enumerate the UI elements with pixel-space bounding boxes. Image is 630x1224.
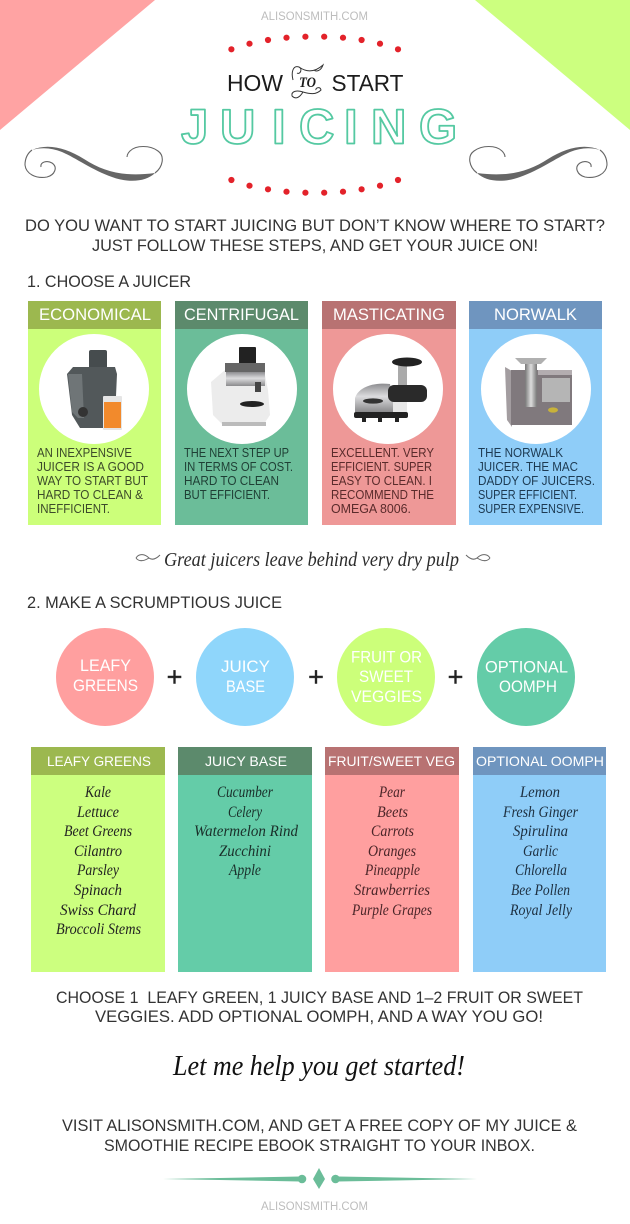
circle: fruit or sweet veggies — [337, 628, 435, 726]
intro text: DO YOU WANT TO START JUICING BUT DON’T KNOW WHERE TO START? — [25, 216, 605, 235]
plus sign: + — [308, 662, 324, 692]
title: HOW — [227, 70, 283, 96]
heading: step 1: 1. CHOOSE A JUICER — [27, 272, 191, 291]
divider ornament — [163, 1168, 477, 1189]
panel heading: CENTRIFUGAL — [184, 305, 299, 324]
panel text: AN INEXPENSIVE — [37, 446, 132, 460]
panel text: HARD TO CLEAN & — [37, 488, 144, 502]
list items: Carrots — [371, 823, 414, 840]
list items: Lemon — [519, 784, 560, 801]
list heading: OPTIONAL OOMPH — [476, 753, 604, 769]
list items — [194, 784, 299, 879]
list items: Oranges — [368, 843, 416, 860]
panel text: SUPER EXPENSIVE. — [478, 502, 584, 516]
circle: leafy greens — [56, 628, 154, 726]
panel text: DADDY OF JUICERS. — [478, 474, 595, 488]
panel: centrifugal — [175, 301, 308, 525]
circle: optional oomph — [477, 628, 575, 726]
panel text — [478, 446, 595, 516]
panel: masticating — [322, 301, 456, 525]
list panel: optional oomph — [473, 747, 606, 972]
list items: Broccoli Stems — [56, 921, 141, 938]
visit text — [62, 1116, 578, 1155]
dotted arc top — [228, 34, 401, 52]
panel text: EFFICIENT. SUPER — [331, 460, 432, 474]
panel text — [331, 446, 435, 516]
visit text: VISIT ALISONSMITH.COM, AND GET A FREE COPY OF MY JUICE & — [62, 1116, 578, 1135]
list items: Bee Pollen — [511, 882, 570, 899]
corner triangle: pink — [0, 0, 155, 130]
list items: Beets — [377, 804, 408, 821]
list items — [56, 784, 141, 938]
panel text: THE NORWALK — [478, 446, 564, 460]
site name top: ALISONSMITH.COM — [261, 11, 368, 23]
plus sign: + — [167, 662, 182, 692]
list items: Chlorella — [515, 862, 567, 879]
list items: Celery — [228, 804, 263, 821]
instructions text: CHOOSE 1 LEAFY GREEN, 1 JUICY BASE AND 1–2 FRUIT OR SWEET — [56, 988, 583, 1007]
list items: Pineapple — [364, 862, 420, 879]
list panel: fruit and sweet veg — [325, 747, 459, 972]
panel text: INEFFICIENT. — [37, 502, 110, 516]
circle: juicy base — [196, 628, 294, 726]
panel text: OMEGA 8006. — [331, 502, 411, 516]
title: JUICING — [181, 100, 457, 154]
list items: Spirulina — [513, 823, 568, 840]
instructions text: VEGGIES. ADD OPTIONAL OOMPH, AND A WAY YOU GO! — [95, 1007, 543, 1026]
panel text: THE NEXT STEP UP — [184, 446, 289, 460]
panel text: JUICER IS A GOOD — [37, 460, 144, 474]
visit text: SMOOTHIE RECIPE EBOOK STRAIGHT TO YOUR INBOX. — [104, 1136, 535, 1155]
circle: leafy greens: GREENS — [73, 676, 138, 695]
circle: fruit or sweet veggies: VEGGIES — [351, 687, 422, 706]
panel text: IN TERMS OF COST. — [184, 460, 293, 474]
panel text: HARD TO CLEAN — [184, 474, 279, 488]
list items: Cucumber — [217, 784, 274, 801]
list items: Purple Grapes — [351, 902, 432, 919]
list items: Fresh Ginger — [502, 804, 579, 821]
list panel: juicy base — [178, 747, 312, 972]
circle: fruit or sweet veggies: FRUIT OR — [351, 648, 422, 666]
panel text: SUPER EFFICIENT. — [478, 488, 577, 502]
heading: step 2: 2. MAKE A SCRUMPTIOUS JUICE — [27, 593, 282, 612]
instructions text — [56, 988, 583, 1026]
title: TO — [299, 75, 316, 91]
list heading: JUICY BASE — [205, 753, 287, 769]
list items: Beet Greens — [64, 823, 132, 840]
panel: norwalk — [469, 301, 602, 525]
image: norwalk juicer — [481, 334, 591, 444]
script call to action: Let me help you get started! — [172, 1050, 465, 1082]
panel heading: MASTICATING — [333, 305, 445, 324]
circle: leafy greens: LEAFY — [80, 656, 131, 675]
list items: Pear — [378, 784, 406, 801]
panel text: RECOMMEND THE — [331, 488, 434, 502]
list items: Strawberries — [354, 882, 430, 899]
list items: Kale — [84, 784, 111, 801]
list panel: leafy greens — [31, 747, 165, 972]
panel text: JUICER. THE MAC — [478, 460, 578, 474]
list items: Watermelon Rind — [194, 823, 299, 840]
list items — [502, 784, 579, 919]
panel: economical — [28, 301, 161, 525]
intro text — [25, 216, 605, 255]
circle: optional oomph: OOMPH — [499, 677, 557, 696]
panel text: EXCELLENT. VERY — [331, 446, 435, 460]
list items — [351, 784, 432, 919]
list items: Spinach — [74, 882, 122, 899]
panel text: BUT EFFICIENT. — [184, 488, 270, 502]
list items: Parsley — [76, 862, 120, 879]
circle: juicy base: JUICY — [221, 657, 270, 676]
plus sign: + — [448, 662, 463, 692]
list heading: LEAFY GREENS — [47, 753, 151, 769]
list items: Apple — [228, 862, 261, 879]
corner triangle: green — [475, 0, 630, 130]
image: hand juicer — [39, 334, 149, 444]
panel heading: NORWALK — [494, 305, 578, 324]
list items: Zucchini — [219, 843, 271, 860]
panel text: EASY TO CLEAN. I — [331, 474, 432, 488]
list heading: FRUIT/SWEET VEG — [328, 753, 455, 769]
callout: dry pulp: Great juicers leave behind very dry pulp — [164, 549, 459, 571]
list items: Cilantro — [74, 843, 122, 860]
dotted arc bottom — [228, 177, 401, 196]
swirl right — [470, 146, 607, 181]
circle: fruit or sweet veggies: SWEET — [359, 667, 413, 686]
site name bottom: ALISONSMITH.COM — [261, 1201, 368, 1213]
image: white juicer — [187, 334, 297, 444]
title — [181, 65, 457, 154]
intro text: JUST FOLLOW THESE STEPS, AND GET YOUR JUICE ON! — [92, 236, 538, 255]
list items: Swiss Chard — [60, 902, 137, 919]
swirl left — [25, 146, 162, 181]
panel text: WAY TO START BUT — [37, 474, 148, 488]
list items: Lettuce — [76, 804, 119, 821]
panel text — [184, 446, 293, 502]
title: START — [332, 70, 404, 96]
circle: juicy base: BASE — [226, 677, 265, 696]
image: masticating juicer — [333, 334, 443, 444]
panel text — [37, 446, 148, 516]
list items: Garlic — [523, 843, 558, 860]
circle: optional oomph: OPTIONAL — [485, 658, 568, 676]
panel heading: ECONOMICAL — [39, 305, 151, 324]
list items: Royal Jelly — [509, 902, 573, 919]
